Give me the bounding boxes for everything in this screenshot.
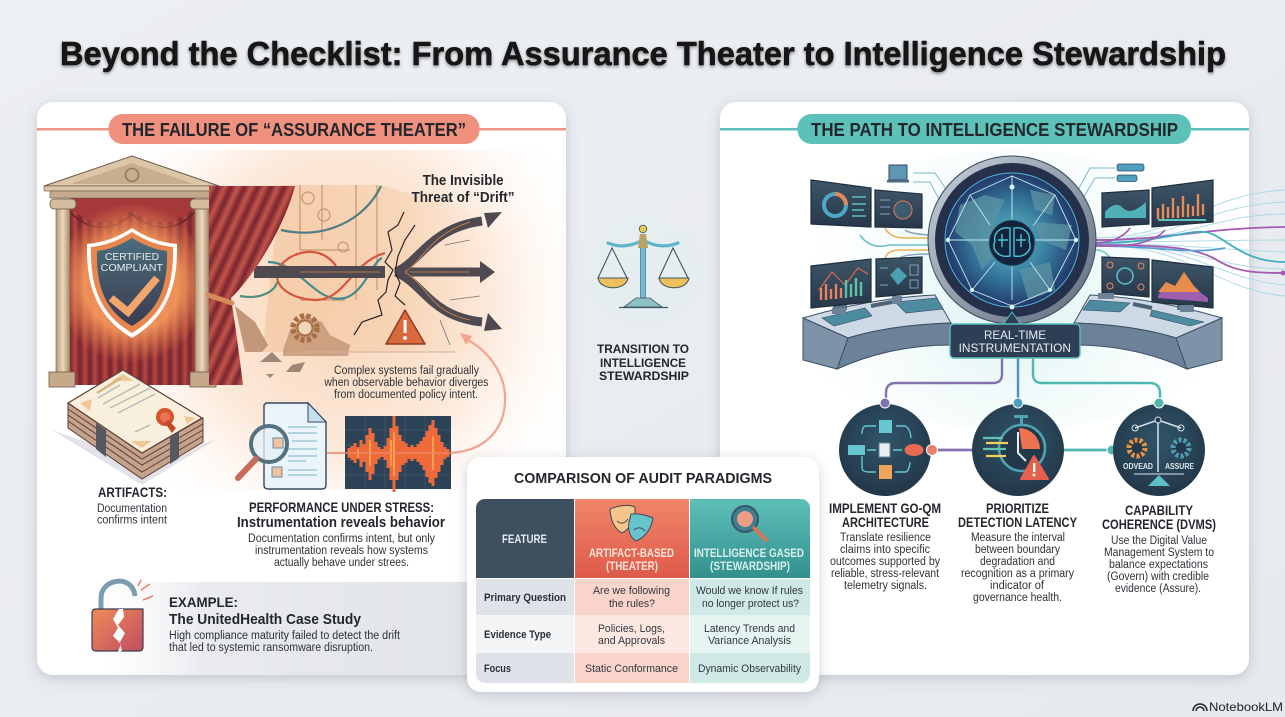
panel: the failure of assurance theater — [37, 102, 566, 675]
row: primary question: Would we know If rules — [696, 585, 803, 597]
header cells — [502, 534, 804, 573]
step text: detection latency: DETECTION LATENCY — [958, 515, 1077, 530]
artifacts label: ARTIFACTS: — [98, 485, 167, 500]
header cells: FEATURE — [502, 534, 547, 546]
row: primary question: Are we following — [593, 585, 670, 597]
step text: detection latency — [958, 501, 1077, 604]
shield: certified compliant: CERTIFIED — [105, 251, 159, 263]
artifacts label: Documentation — [97, 503, 167, 515]
NotebookLM watermark: NotebookLM — [1209, 700, 1283, 714]
performance under stress label — [237, 499, 445, 569]
header cells: INTELLIGENCE GASED — [694, 548, 804, 560]
step text: detection latency: between boundary — [975, 544, 1060, 556]
step text: DVMS — [1102, 503, 1216, 595]
monitors: left — [811, 180, 922, 314]
step text: DVMS: evidence (Assure). — [1115, 583, 1201, 595]
drift heading — [412, 172, 514, 206]
row: primary question: no longer protect us? — [702, 598, 799, 610]
example: UnitedHealth case study: EXAMPLE: — [169, 594, 238, 610]
icon: document under magnifier — [238, 403, 326, 489]
step text: DVMS: balance expectations — [1109, 559, 1208, 571]
step: capability coherence — [1102, 398, 1216, 595]
connectors from instrumentation — [886, 358, 1160, 404]
data streams — [1096, 190, 1285, 296]
real-time instrumentation label: REAL-TIME — [984, 328, 1046, 342]
icon: govern and assure balance: ODVEAD — [1123, 462, 1153, 471]
transition label — [597, 342, 689, 383]
icon: theater masks — [610, 505, 653, 541]
row: evidence type: Evidence Type — [484, 629, 551, 641]
drift heading: Threat of “Drift” — [412, 189, 514, 206]
illustration: drifting wall with arrows — [235, 185, 502, 378]
icon: warning triangle — [386, 310, 425, 344]
cracks — [354, 212, 415, 335]
row: evidence type — [484, 623, 795, 647]
example: UnitedHealth case study: High compliance maturity failed to detect the drift — [169, 630, 401, 642]
header cells: ARTIFACT-BASED — [589, 548, 674, 560]
panel heading: path: THE PATH TO INTELLIGENCE STEWARDSHIP — [811, 120, 1178, 140]
icon: architecture flow — [839, 398, 938, 496]
step text: detection latency: recognition as a primary — [961, 568, 1074, 580]
panel heading: failure — [37, 114, 566, 144]
icon: broken padlock — [92, 580, 153, 652]
small device icons — [887, 164, 1144, 182]
wiring behind monitors — [860, 168, 1165, 258]
row: focus — [484, 663, 801, 675]
comparison table card — [467, 457, 819, 692]
row: primary question — [484, 585, 803, 610]
icon: stopwatch with warning — [972, 398, 1117, 496]
row: primary question: Primary Question — [484, 592, 566, 604]
artifacts label — [97, 485, 168, 526]
transition label: STEWARDSHIP — [599, 369, 689, 383]
step text: detection latency: governance health. — [973, 592, 1062, 604]
step text: GO-QM: telemetry signals. — [844, 580, 927, 592]
example: UnitedHealth case study: The UnitedHealth Case Study — [169, 611, 362, 628]
drift description — [323, 365, 489, 401]
header cells: (STEWARDSHIP) — [710, 561, 790, 573]
illustration: temple with shield — [44, 156, 295, 387]
performance under stress label: Instrumentation reveals behavior — [237, 514, 445, 531]
shield: certified compliant — [60, 199, 204, 367]
transition label: TRANSITION TO — [597, 342, 689, 356]
performance under stress label: Documentation confirms intent, but only — [248, 533, 435, 545]
row: focus: Dynamic Observability — [698, 663, 801, 675]
cables — [240, 186, 385, 300]
transition: scales — [583, 215, 703, 383]
performance under stress label: instrumentation reveals how systems — [255, 545, 428, 557]
step text: GO-QM: claims into specific — [840, 544, 930, 556]
row: primary question: the rules? — [609, 598, 655, 610]
comparison table — [476, 499, 810, 683]
header cells: (THEATER) — [606, 561, 658, 573]
step text: detection latency: indicator of — [990, 580, 1045, 592]
drift description: from documented policy intent. — [334, 389, 478, 401]
real-time instrumentation label: INSTRUMENTATION — [959, 341, 1071, 355]
step: implement GO-QM architecture — [829, 398, 972, 592]
step: prioritize detection latency — [958, 398, 1117, 604]
example: UnitedHealth case study — [169, 594, 401, 654]
artifacts label: confirms intent — [97, 514, 168, 526]
step text: detection latency: degradation and — [980, 556, 1055, 568]
icon: govern and assure balance — [1113, 398, 1205, 496]
performance under stress label: actually behave under strees. — [274, 557, 409, 569]
panel: the path to intelligence stewardship — [720, 102, 1285, 675]
step text: GO-QM — [829, 501, 941, 592]
row: evidence type: Policies, Logs, — [598, 623, 665, 635]
main arrow: drift — [254, 212, 502, 331]
control console — [803, 295, 1222, 369]
step text: GO-QM: IMPLEMENT GO-QM — [829, 501, 941, 516]
step text: DVMS: CAPABILITY — [1125, 503, 1193, 518]
drift description: Complex systems fail gradually — [334, 365, 479, 377]
icon: balance scales — [583, 215, 703, 325]
row: focus: Focus — [484, 663, 511, 675]
step text: DVMS: Use the Digital Value — [1111, 535, 1207, 547]
columns and pediment — [44, 156, 219, 387]
step text: GO-QM: Translate resilience — [840, 532, 931, 544]
step text: GO-QM: ARCHITECTURE — [842, 515, 929, 530]
illustration: stack of documents — [52, 370, 215, 485]
performance under stress label: PERFORMANCE UNDER STRESS: — [249, 499, 434, 515]
shield: certified compliant: COMPLIANT — [101, 262, 164, 274]
example: UnitedHealth case study: that led to systemic ransomware disruption. — [169, 642, 373, 654]
curtain — [208, 186, 295, 385]
arrow: from instrumentation up to drift — [451, 333, 505, 453]
panel heading: failure: THE FAILURE OF “ASSURANCE THEATER” — [122, 120, 466, 140]
row: evidence type: Latency Trends and — [704, 623, 795, 635]
step text: detection latency: Measure the interval — [971, 532, 1065, 544]
chart: stress waveform — [327, 416, 451, 492]
table heading: COMPARISON OF AUDIT PARADIGMS — [514, 470, 772, 487]
step text: DVMS: COHERENCE (DVMS) — [1102, 517, 1216, 532]
step text: GO-QM: reliable, stress-relevant — [831, 568, 940, 580]
row: evidence type: and Approvals — [598, 635, 665, 647]
drift heading: The Invisible — [423, 172, 504, 189]
step text: DVMS: Management System to — [1104, 547, 1214, 559]
real-time instrumentation label — [950, 312, 1080, 358]
icon: magnifier with brain — [732, 506, 766, 540]
drift description: when observable behavior diverges — [323, 377, 489, 389]
panel heading: path — [720, 114, 1249, 144]
row: focus: Static Conformance — [585, 663, 678, 675]
step text: detection latency: PRIORITIZE — [986, 501, 1049, 516]
globe with brain — [928, 156, 1096, 324]
step text: GO-QM: outcomes supported by — [830, 556, 940, 568]
row: evidence type: Variance Analysis — [708, 635, 791, 647]
icon: govern and assure balance: ASSURE — [1165, 462, 1195, 471]
transition label: INTELLIGENCE — [600, 356, 686, 370]
title: Beyond the Checklist: From Assurance Theater to Intelligence Stewardship — [60, 35, 1226, 72]
monitors: right — [1098, 180, 1213, 312]
rubble and gear — [235, 306, 455, 378]
step text: DVMS: (Govern) with credible — [1107, 571, 1209, 583]
